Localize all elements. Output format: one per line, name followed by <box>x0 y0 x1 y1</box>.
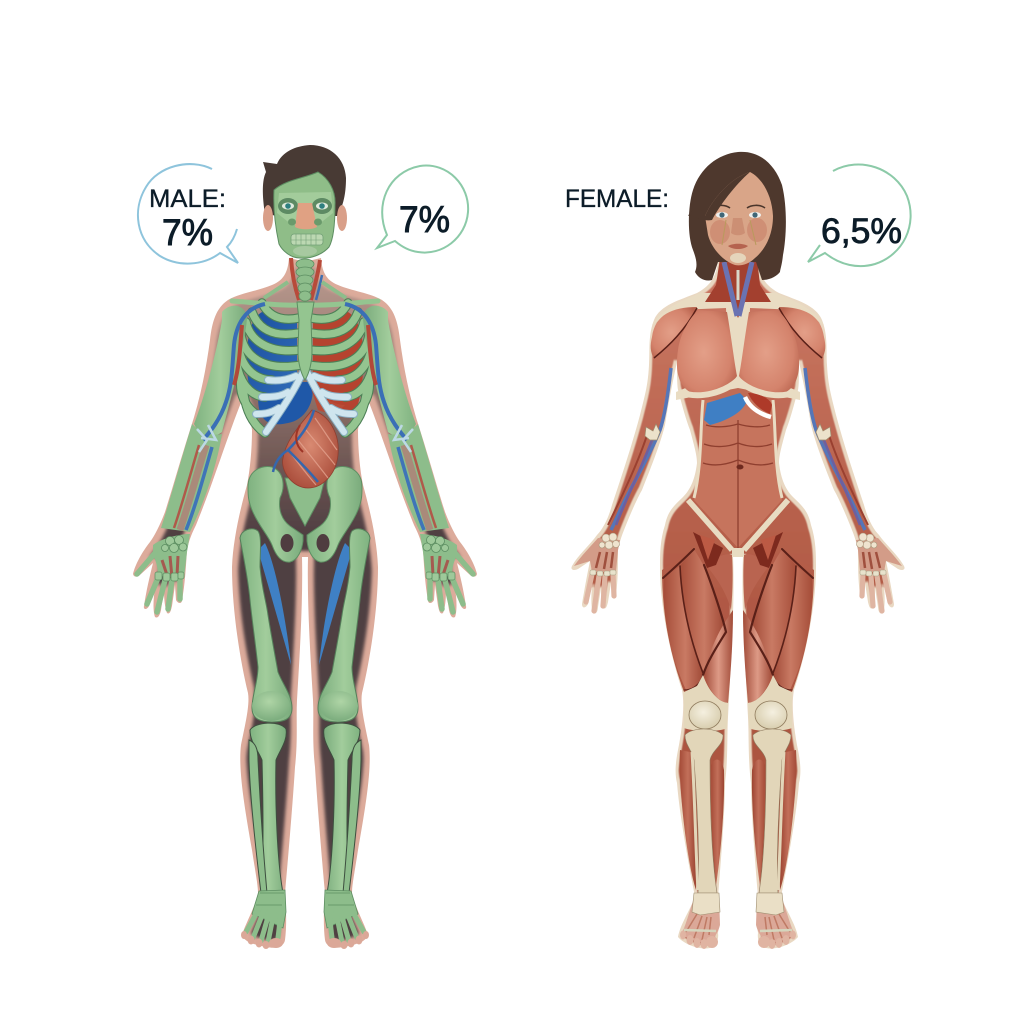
lungs <box>247 312 363 412</box>
text: male value left: 7% <box>162 212 213 253</box>
sternum <box>297 302 314 380</box>
text: male label: MALE: <box>149 185 226 213</box>
chest muscles <box>677 310 799 395</box>
speech bubble: female value, green <box>808 164 911 266</box>
female arms and legs <box>574 307 902 949</box>
speech bubble: male value, green <box>377 166 468 253</box>
female muscle body <box>571 262 905 948</box>
male head <box>263 145 347 258</box>
male figure <box>133 145 477 949</box>
speech bubble: male label, blue <box>138 164 238 264</box>
red organ with white band <box>745 393 772 417</box>
female cream silhouette <box>571 262 905 948</box>
stomach and liver <box>258 382 345 424</box>
clavicles <box>232 301 378 305</box>
pelvis <box>248 467 362 562</box>
abdomen muscles <box>680 380 796 557</box>
blue organ <box>704 393 747 425</box>
rib cage <box>237 303 373 433</box>
text: female value: 6,5% <box>821 212 902 251</box>
female head <box>688 152 786 281</box>
male skin silhouette <box>133 258 477 948</box>
cream shoulder yoke and sternum <box>652 293 824 400</box>
neck muscles and vessels <box>705 258 771 318</box>
text: female label: FEMALE: <box>565 185 669 213</box>
male arms and legs <box>137 304 473 949</box>
male dark body interior <box>133 258 477 948</box>
intestine organ <box>273 410 338 488</box>
neck arteries and vertebrae <box>264 258 346 301</box>
text: male value right: 7% <box>399 199 450 240</box>
female figure <box>571 152 905 949</box>
